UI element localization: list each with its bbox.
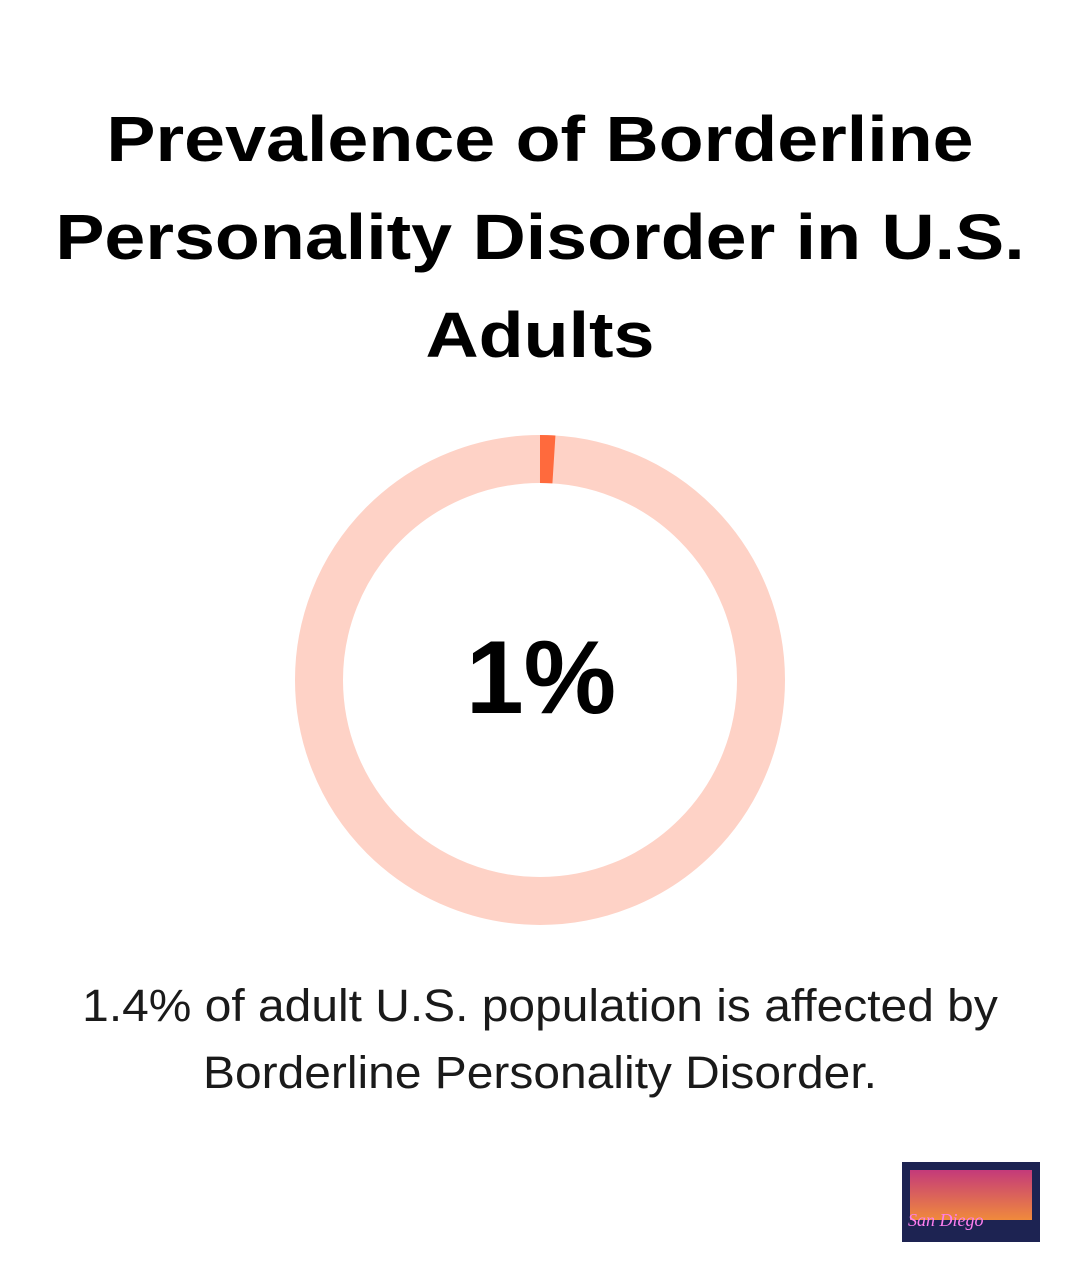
logo: San Diego [908,1210,984,1230]
description: 1.4% of adult U.S. population is affected by [82,980,998,1031]
title: Personality Disorder in U.S. [55,201,1025,273]
title: Adults [426,299,654,371]
description: Borderline Personality Disorder. [203,1047,877,1098]
title [55,103,1025,371]
logo [902,1162,1040,1242]
title: Prevalence of Borderline [106,103,974,175]
description [82,980,998,1098]
donut chart: 1% [466,620,616,736]
